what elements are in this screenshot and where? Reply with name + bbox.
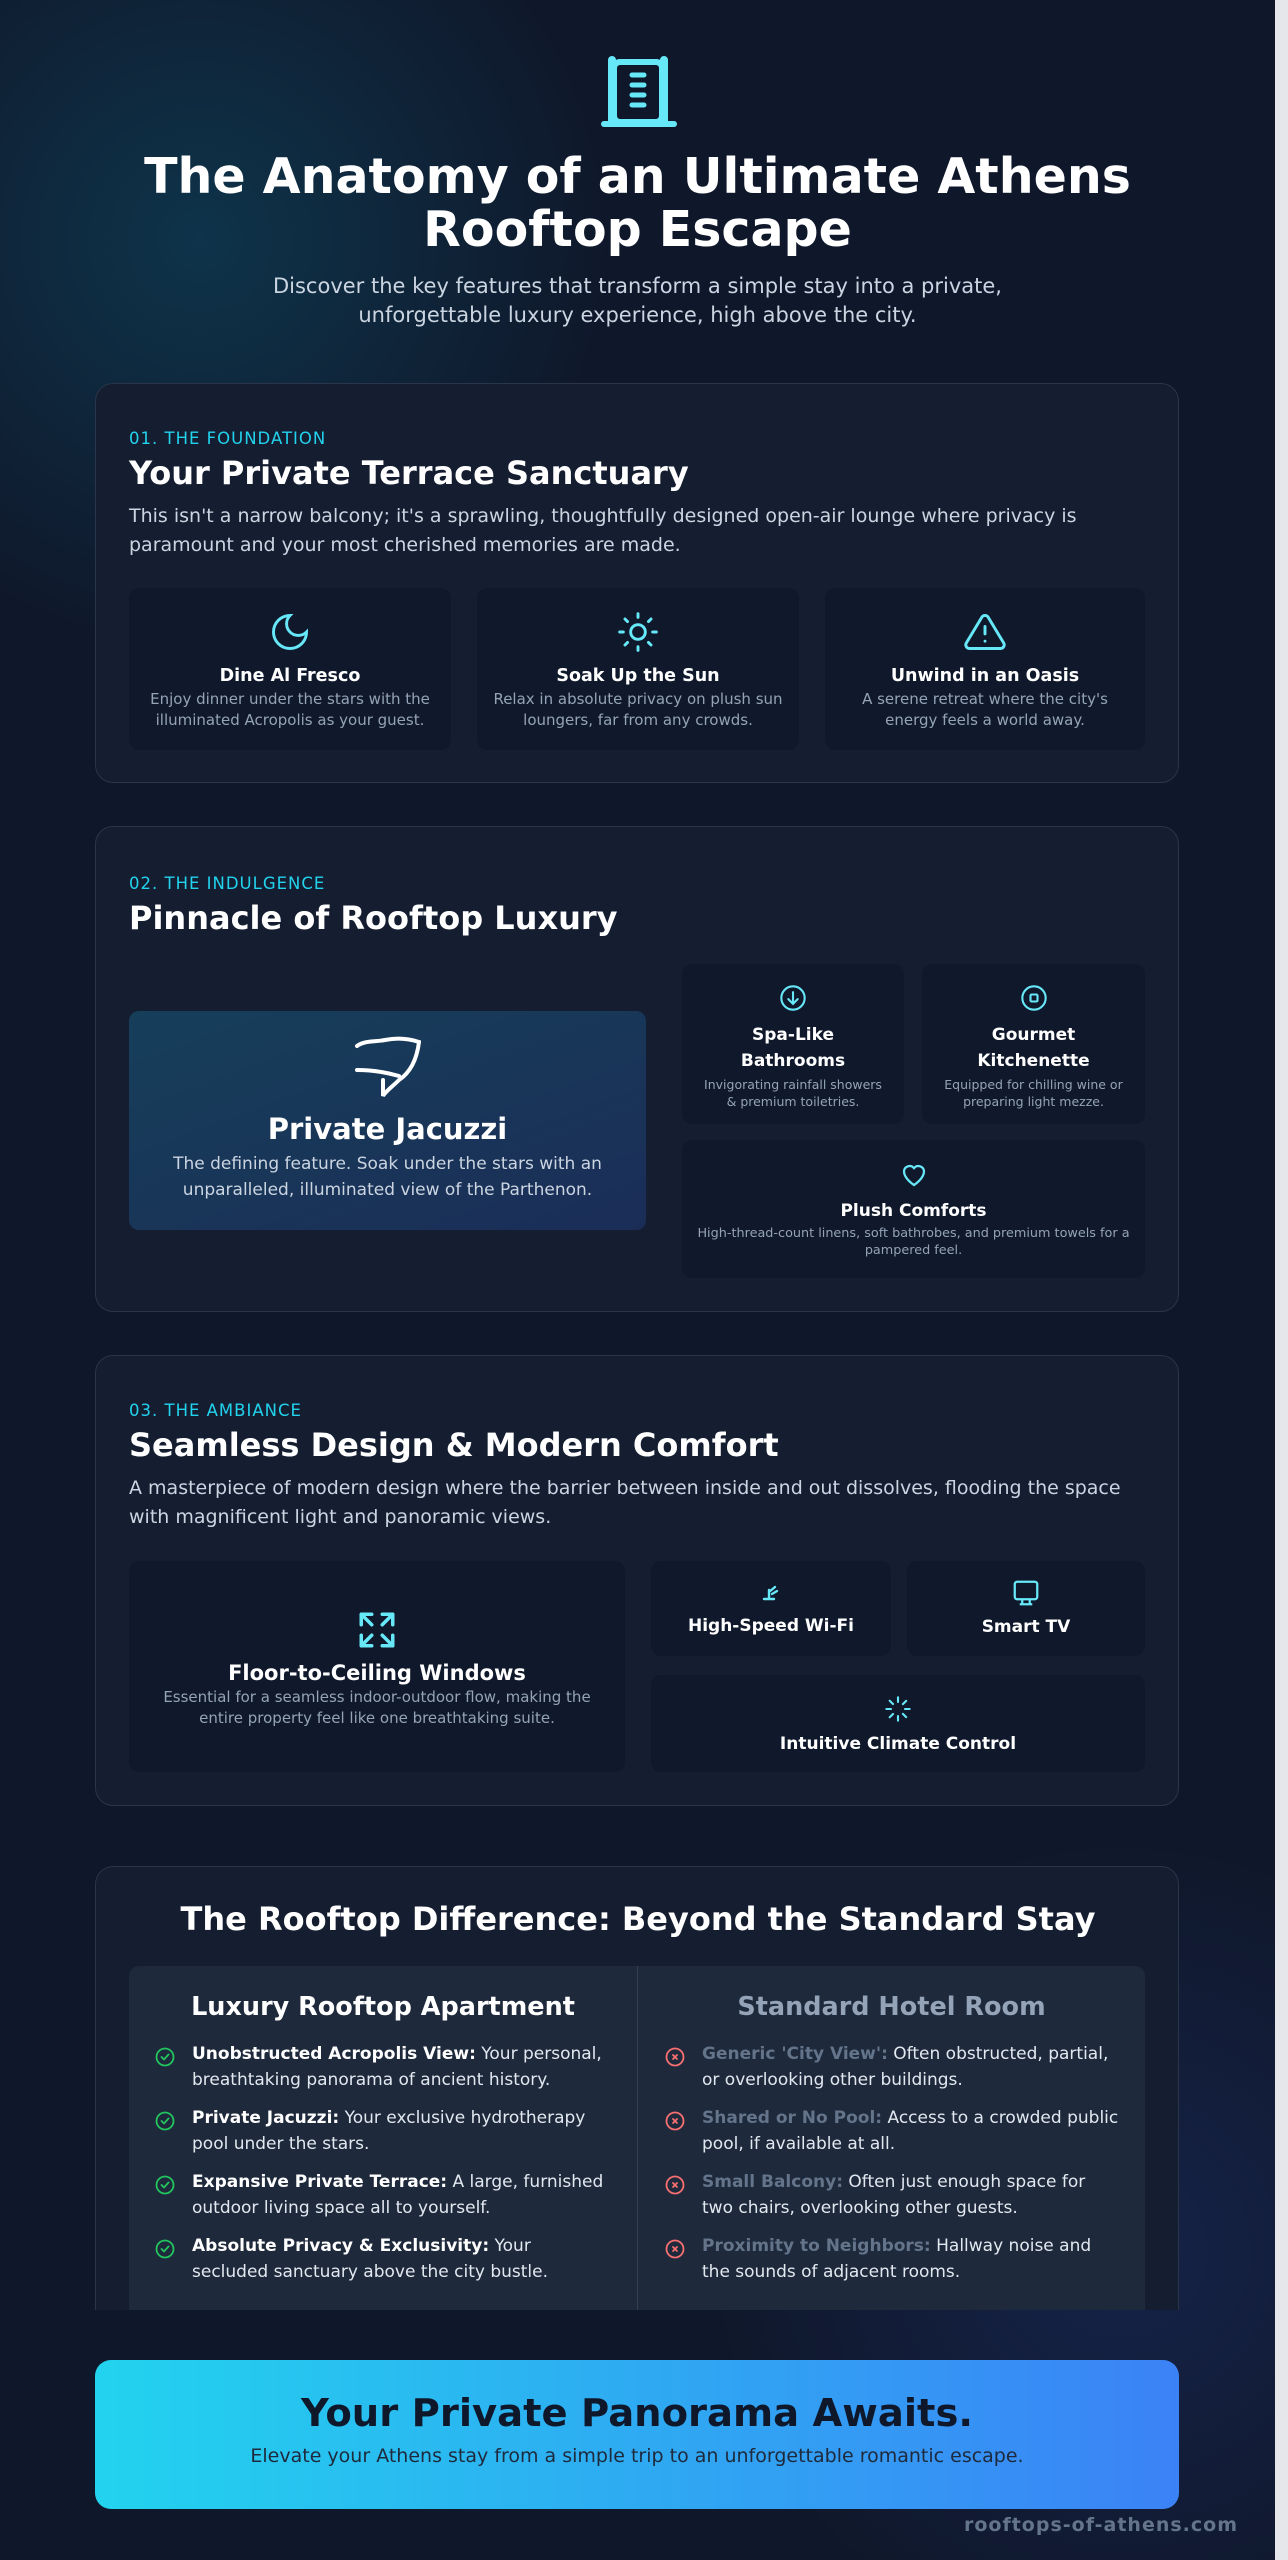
call to action xyxy=(95,2360,1179,2509)
icon: tv xyxy=(1014,1580,1038,1606)
item: pool under the stars. xyxy=(192,2134,369,2154)
item: secluded sanctuary above the city bustle. xyxy=(192,2262,548,2282)
title: Rooftop Escape xyxy=(423,201,852,258)
heading: Pinnacle of Rooftop Luxury xyxy=(129,899,618,937)
card: floor-to-ceiling windows: entire property feel like one breathtaking suite. xyxy=(199,1709,555,1727)
icon: jacuzzi xyxy=(355,1036,421,1097)
item xyxy=(156,2044,602,2090)
item: Unobstructed Acropolis View: Your personal, xyxy=(192,2044,602,2064)
subtitle: Discover the key features that transform a simple stay into a private, xyxy=(273,274,1002,298)
item xyxy=(156,2172,603,2218)
icon: sun xyxy=(618,612,658,652)
card: plush comforts: pampered feel. xyxy=(865,1243,962,1258)
section label: 02. THE INDULGENCE xyxy=(129,874,325,893)
title: The Anatomy of an Ultimate Athens xyxy=(144,148,1131,205)
card: dine al fresco: illuminated Acropolis as your guest. xyxy=(156,711,424,729)
card: private jacuzzi: The defining feature. Soak under the stars with an xyxy=(173,1154,602,1174)
card: plush comforts xyxy=(682,1140,1145,1278)
card: unwind in an oasis: A serene retreat where the city's xyxy=(862,690,1108,708)
item xyxy=(666,2108,1118,2154)
section label: 01. THE FOUNDATION xyxy=(129,429,326,448)
card: private jacuzzi xyxy=(129,1011,646,1230)
item: outdoor living space all to yourself. xyxy=(192,2198,490,2218)
panel: foundation xyxy=(95,383,1179,783)
card: climate control xyxy=(651,1675,1145,1772)
card: spa-like bathrooms: Invigorating rainfall showers xyxy=(704,1077,882,1092)
paragraph: This isn't a narrow balcony; it's a sprawling, thoughtfully designed open-air lounge where privacy is paramount and your most cherished memories are made. xyxy=(129,505,1077,556)
card: gourmet kitchenette: preparing light mezze. xyxy=(963,1094,1104,1109)
card: gourmet kitchenette: Gourmet xyxy=(992,1025,1075,1045)
item xyxy=(666,2172,1086,2218)
panel: comparison xyxy=(95,1866,1179,2310)
icon: square circle xyxy=(1021,985,1047,1011)
card: gourmet kitchenette: Kitchenette xyxy=(977,1051,1090,1071)
card: plush comforts: High-thread-count linens, soft bathrobes, and premium towels for a xyxy=(697,1226,1130,1241)
card: gourmet kitchenette: Equipped for chilling wine or xyxy=(944,1077,1123,1092)
card: wi-fi xyxy=(651,1561,891,1656)
comparison table xyxy=(129,1966,1145,2326)
card: unwind in an oasis: Unwind in an Oasis xyxy=(891,666,1079,686)
card: dine al fresco xyxy=(129,588,451,750)
item: Proximity to Neighbors: Hallway noise and xyxy=(702,2236,1091,2256)
subtitle: unforgettable luxury experience, high above the city. xyxy=(358,303,917,327)
card: soak up the sun: Soak Up the Sun xyxy=(556,666,720,686)
icon: expand xyxy=(359,1612,395,1648)
column heading: Luxury Rooftop Apartment xyxy=(191,1992,575,2022)
icon: building xyxy=(601,56,677,127)
item: Small Balcony: Often just enough space for xyxy=(702,2172,1085,2192)
card: floor-to-ceiling windows: Floor-to-Ceiling Windows xyxy=(228,1661,526,1685)
icon: triangle xyxy=(964,614,1006,650)
footer: rooftops-of-athens.com xyxy=(964,2514,1238,2536)
column: standard hotel xyxy=(666,1992,1118,2282)
panel: indulgence xyxy=(95,826,1179,1312)
paragraph: A masterpiece of modern design where the barrier between inside and out dissolves, flooding the space with magnificent light and panoramic views. xyxy=(129,1477,1121,1528)
card: floor-to-ceiling windows: Essential for a seamless indoor-outdoor flow, making the xyxy=(163,1688,591,1706)
comparison title: The Rooftop Difference: Beyond the Standard Stay xyxy=(181,1900,1095,1938)
item: breathtaking panorama of ancient history. xyxy=(192,2070,550,2090)
item: Absolute Privacy & Exclusivity: Your xyxy=(192,2236,531,2256)
item: Generic 'City View': Often obstructed, partial, xyxy=(702,2044,1108,2064)
item: Expansive Private Terrace: A large, furnished xyxy=(192,2172,603,2192)
column: luxury rooftop xyxy=(156,1992,603,2282)
icon: arrow circle xyxy=(780,985,806,1011)
cta text: Elevate your Athens stay from a simple trip to an unforgettable romantic escape. xyxy=(250,2445,1024,2467)
icon: wifi xyxy=(762,1586,778,1600)
item: Shared or No Pool: Access to a crowded public xyxy=(702,2108,1118,2128)
heading: Your Private Terrace Sanctuary xyxy=(129,454,689,492)
card: spa-like bathrooms: Spa-Like xyxy=(752,1025,834,1045)
card: spa-like bathrooms xyxy=(682,964,904,1124)
icon: loader xyxy=(885,1696,911,1722)
card: spa-like bathrooms: & premium toiletries. xyxy=(727,1094,859,1109)
card: dine al fresco: Dine Al Fresco xyxy=(220,666,360,686)
item: or overlooking other buildings. xyxy=(702,2070,963,2090)
item: the sounds of adjacent rooms. xyxy=(702,2262,960,2282)
card: soak up the sun xyxy=(477,588,799,750)
item: two chairs, overlooking other guests. xyxy=(702,2198,1018,2218)
icon: heart xyxy=(902,1164,926,1186)
item xyxy=(156,2236,548,2282)
card: private jacuzzi: unparalleled, illuminated view of the Parthenon. xyxy=(183,1180,592,1200)
card: private jacuzzi: Private Jacuzzi xyxy=(268,1112,507,1146)
card: gourmet kitchenette xyxy=(922,964,1145,1124)
card: unwind in an oasis: energy feels a world away. xyxy=(885,711,1085,729)
card: plush comforts: Plush Comforts xyxy=(840,1201,987,1221)
card: soak up the sun: Relax in absolute privacy on plush sun xyxy=(493,690,783,708)
title xyxy=(144,148,1131,258)
subtitle xyxy=(273,274,1002,327)
card: smart tv: Smart TV xyxy=(982,1617,1070,1637)
card: climate control: Intuitive Climate Control xyxy=(780,1734,1016,1754)
item xyxy=(156,2108,585,2154)
panel: ambiance xyxy=(95,1355,1179,1806)
item: Private Jacuzzi: Your exclusive hydrotherapy xyxy=(192,2108,585,2128)
card: floor-to-ceiling windows xyxy=(129,1561,625,1772)
icon: moon xyxy=(272,614,308,650)
card: soak up the sun: loungers, far from any crowds. xyxy=(523,711,753,729)
cta heading: Your Private Panorama Awaits. xyxy=(301,2391,973,2436)
card: smart tv xyxy=(907,1561,1145,1656)
card: dine al fresco: Enjoy dinner under the stars with the xyxy=(150,690,430,708)
card: wi-fi: High-Speed Wi-Fi xyxy=(688,1616,854,1636)
item xyxy=(666,2236,1091,2282)
card: unwind in an oasis xyxy=(825,588,1145,750)
section label: 03. THE AMBIANCE xyxy=(129,1401,302,1420)
column heading: Standard Hotel Room xyxy=(737,1992,1046,2022)
heading: Seamless Design & Modern Comfort xyxy=(129,1426,779,1464)
card: spa-like bathrooms: Bathrooms xyxy=(741,1051,845,1071)
item: pool, if available at all. xyxy=(702,2134,895,2154)
item xyxy=(666,2044,1108,2090)
